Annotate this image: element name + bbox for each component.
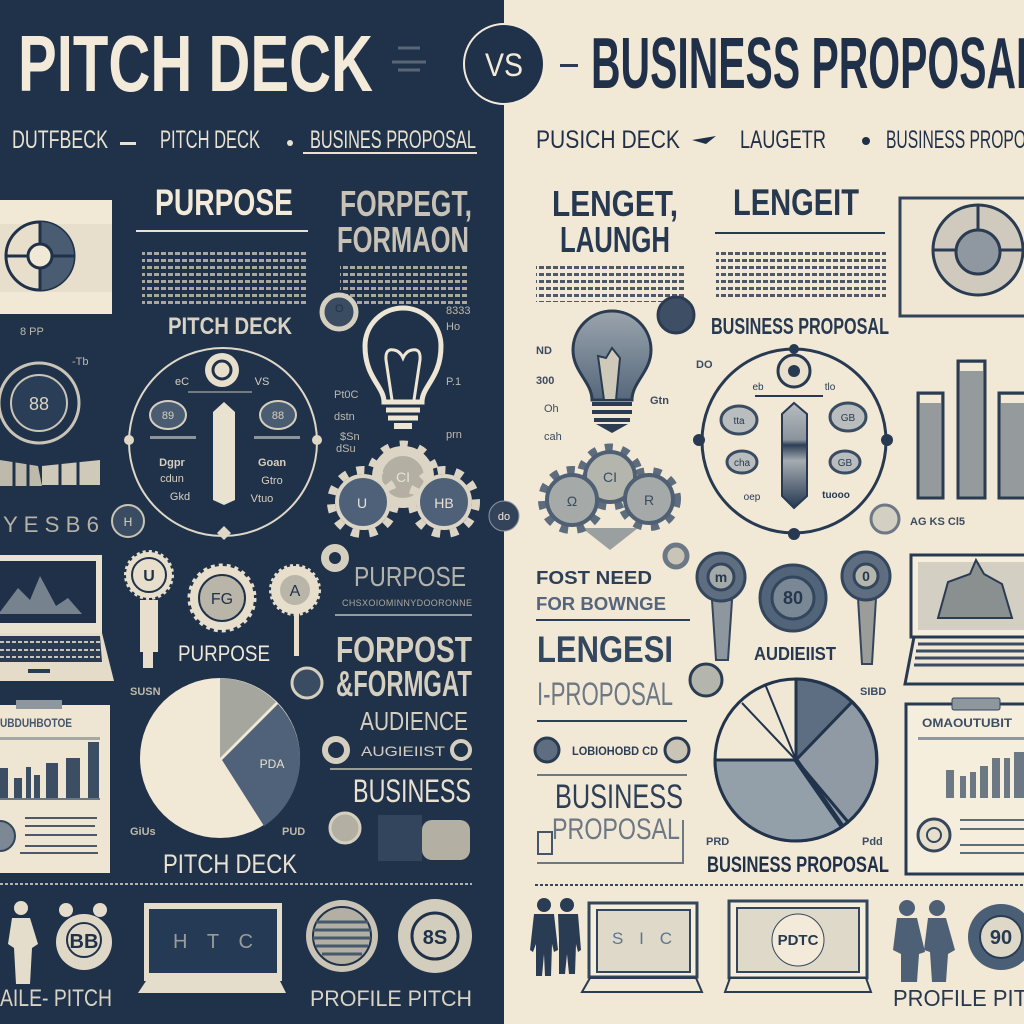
people: bottom right b [893, 900, 1024, 982]
rosettes: right: m [715, 569, 727, 585]
rosettes: left [126, 552, 319, 668]
subheading row: left: BUSINES PROPOSAL [310, 126, 476, 154]
label: pitch deck: PITCH DECK [168, 313, 293, 340]
diagram: right circular: tlo [825, 382, 836, 393]
heading: lenght lunch [552, 183, 678, 260]
diagram: left circular: Dgpr [159, 457, 186, 469]
small captions: SUSN [130, 686, 161, 698]
subheading row: right: LAUGETR [740, 126, 826, 154]
rosettes: left: FG [211, 591, 233, 608]
icon: small node left [112, 505, 144, 537]
icon: small header mark [392, 48, 426, 70]
report card: left [0, 700, 110, 873]
small captions: P.1 [446, 376, 461, 388]
people: bottom right b: 90 [990, 927, 1012, 949]
emblems: bottom left: 8S [423, 927, 447, 949]
captions: bottom left: PROFILE PITCH [310, 986, 472, 1011]
small captions right [536, 345, 965, 848]
subheading row: right: PUSICH DECK [536, 126, 680, 154]
label: pitch deck lower: PITCH DECK [163, 849, 297, 879]
diagram: left circular: Vtuo [251, 493, 273, 505]
heading: format [337, 183, 472, 260]
gears: right [542, 447, 677, 550]
heading group: lengest proposal: FOR BOWNGE [536, 594, 666, 614]
heading: lenght: LENGEIT [733, 182, 859, 223]
chart card: top left [0, 200, 112, 314]
gears: left: U [357, 495, 367, 511]
diagram: left circular: cdun [160, 473, 184, 485]
subheading row: left: DUTFBECK [12, 126, 108, 154]
pie chart: left [140, 678, 300, 838]
small captions right: PRD [706, 836, 729, 848]
heading group: purpose forpost: &FORMGAT [336, 663, 472, 704]
heading: lenght lunch: LENGET, [552, 183, 678, 224]
diagram: right circular: tuooo [822, 490, 850, 501]
laptop: bottom left [138, 903, 286, 993]
title: pitch deck: PITCH DECK [18, 19, 373, 108]
badge: vs: VS [485, 47, 523, 83]
panel: pitch deck background [0, 0, 504, 1024]
heading: purpose: PURPOSE [155, 182, 293, 223]
gears: left: CI [396, 469, 410, 485]
laptop: bottom right a: SIC [612, 929, 672, 948]
pie chart: right [715, 679, 877, 841]
small captions right: Pdd [862, 836, 883, 848]
heading group: purpose forpost: CHSXOIOMINNYDOORONNE [342, 598, 472, 608]
report card: right: OMAOUTUBIT [922, 716, 1013, 730]
icons: circles right lower [535, 297, 899, 762]
small captions right: 300 [536, 375, 554, 387]
heading: format: FORPEGT, [340, 183, 472, 224]
heading group: purpose forpost: AUGIEIIST [361, 743, 446, 759]
icons: circles left lower [292, 295, 470, 861]
small captions: O [335, 303, 344, 315]
diagram: left circular: Goan [258, 457, 286, 469]
heading: format: FORMAON [337, 219, 469, 260]
people: left [8, 901, 112, 984]
small captions: PUD [282, 826, 305, 838]
heading group: lengest proposal: PROPOSAL [552, 813, 680, 846]
small captions right: Gtn [650, 395, 669, 407]
diagram: left circular: 89 [162, 410, 174, 422]
rosettes: left: A [290, 583, 301, 600]
laptop: bottom left: HTC [173, 931, 253, 953]
people: left: BB [70, 931, 98, 953]
captions: bottom left [0, 985, 472, 1012]
icon: light bulb left [365, 308, 441, 426]
small captions: 8 PP [20, 326, 44, 338]
label: business proposal: BUSINESS PROPOSAL [711, 313, 889, 339]
small captions right: AG KS Cl5 [910, 516, 965, 528]
small captions: $Sn [340, 431, 360, 443]
people: bottom right [530, 898, 581, 976]
heading group: lengest proposal: FOST NEED [536, 568, 652, 588]
report card: right [906, 698, 1024, 874]
diagram: right circular: tta [733, 416, 745, 427]
small captions: -Tb [72, 356, 88, 368]
diagram: left circular [124, 348, 322, 540]
diagram: right circular: cha [734, 458, 750, 469]
small captions right: ND [536, 345, 552, 357]
diagram: left circular: 88 [272, 410, 284, 422]
diagram: right circular [693, 344, 893, 540]
emblems: bottom left [306, 899, 472, 973]
small captions right: cah [544, 431, 562, 443]
caption rows: Y E S B 6 [3, 512, 99, 537]
subheading row: right [536, 126, 1024, 154]
heading group: purpose forpost: PURPOSE [354, 561, 466, 592]
icon: center connector: do [498, 511, 510, 523]
gears: left: HB [434, 495, 454, 511]
label: business proposal lower: BUSINESS PROPOSAL [707, 852, 889, 877]
diagram: right circular: eb [752, 382, 764, 393]
icon: light bulb right [573, 311, 651, 433]
chart card: top right [900, 198, 1024, 316]
divider: lower rows [0, 884, 1024, 885]
small captions: 8333 [446, 305, 470, 317]
small captions: prn [446, 429, 462, 441]
small captions right: SIBD [860, 686, 886, 698]
heading group: purpose forpost [330, 561, 472, 809]
rosettes: right: 0 [862, 568, 870, 584]
laptop: bottom right b [725, 901, 871, 992]
heading: lenght lunch: LAUNGH [560, 219, 670, 260]
heading group: purpose forpost: AUDIENCE [360, 706, 468, 736]
icon: circle emblem left [0, 363, 100, 486]
heading group: lengest proposal [536, 568, 690, 864]
icon: right header dash [560, 64, 578, 67]
text block: left body copy [136, 230, 468, 304]
rosettes: right: 80 [783, 588, 803, 608]
captions: bottom left: AILE- PITCH [0, 985, 112, 1012]
gears: left [331, 444, 476, 534]
label: purpose small: PURPOSE [178, 641, 270, 666]
heading group: lengest proposal: LOBIOHOBD CD [572, 744, 658, 758]
panel: business proposal background [504, 0, 1024, 1024]
laptop: left [0, 555, 114, 681]
heading group: purpose forpost: BUSINESS [353, 773, 471, 809]
laptop: bottom right a [582, 903, 702, 992]
rosettes: right [697, 552, 890, 664]
badge: vs [464, 24, 544, 104]
small captions right: DO [696, 359, 713, 371]
gears: right: CI [603, 469, 617, 485]
report card: left: UBDUHBOTOE [0, 716, 72, 730]
label: audience small: AUDIEIIST [754, 644, 836, 664]
small captions: dstn [334, 411, 355, 423]
diagram: right circular: GB [841, 413, 856, 424]
diagram: left circular: Gkd [170, 491, 190, 503]
gears: right: R [644, 492, 654, 508]
small captions: Pt0C [334, 389, 359, 401]
text block: right body copy [536, 232, 886, 302]
diagram: left circular: Gtro [261, 475, 283, 487]
subheading row: left: PITCH DECK [160, 126, 260, 154]
rosettes: left: U [143, 568, 155, 585]
small captions right: Oh [544, 403, 559, 415]
diagram: right circular: GB [838, 458, 853, 469]
icon: center connector [489, 501, 519, 531]
small captions: Ho [446, 321, 460, 333]
heading group: lengest proposal: I-PROPOSAL [537, 676, 673, 712]
small captions: dSu [336, 443, 356, 455]
heading group: lengest proposal: BUSINESS [555, 778, 683, 816]
small captions [20, 303, 470, 838]
heading group: purpose forpost: FORPOST [336, 629, 472, 670]
pie chart: left: PDA [260, 757, 284, 771]
icon: circle emblem left: 88 [29, 394, 49, 414]
diagram: right circular: oep [744, 492, 761, 503]
bar chart: top right [918, 361, 1024, 498]
diagram: left circular: eC [175, 376, 189, 388]
icon: small node left: H [124, 515, 132, 529]
diagram: left circular: VS [255, 376, 269, 388]
laptop: bottom right b: PDTC [778, 932, 819, 949]
heading group: lengest proposal: LENGESI [537, 629, 673, 670]
subheading row: left [12, 126, 477, 154]
gears: right: Ω [567, 493, 577, 509]
small captions: GiUs [130, 826, 156, 838]
laptop: right [905, 555, 1024, 684]
